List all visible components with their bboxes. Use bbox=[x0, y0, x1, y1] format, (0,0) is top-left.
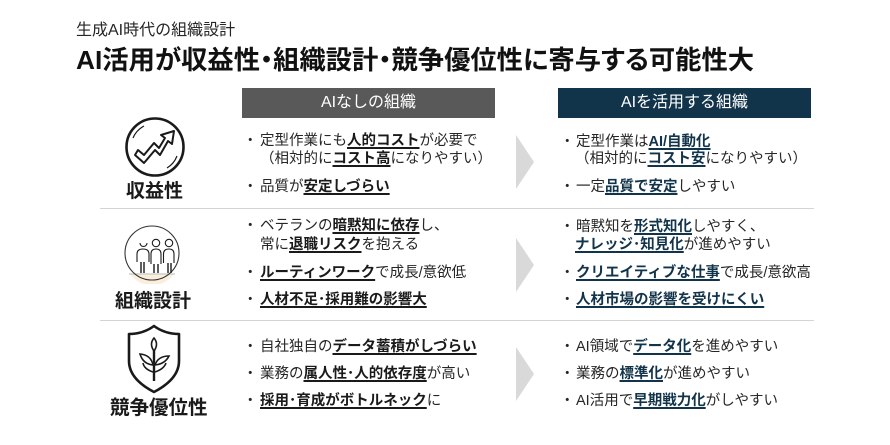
text: competitive with AI bbox=[560, 338, 778, 409]
arrow: organization bbox=[516, 238, 534, 292]
text: ・ bbox=[243, 265, 258, 281]
text: ・ bbox=[560, 393, 574, 409]
text: ・ bbox=[243, 393, 258, 409]
text: 人材不足･採用難の影響大 bbox=[260, 292, 427, 308]
text: ナレッジ･知見化が進めやすい bbox=[575, 237, 771, 253]
text: competitive without AI bbox=[243, 338, 477, 409]
label: profitability: 収益性 bbox=[126, 181, 183, 202]
column header: without AI: AIなしの組織 bbox=[321, 94, 416, 111]
text: 品質が安定しづらい bbox=[260, 179, 390, 195]
icon: shield with plant bbox=[128, 324, 180, 394]
text: profitability without AI bbox=[243, 132, 492, 195]
text: 採用･育成がボトルネックに bbox=[260, 393, 441, 409]
text: ・ bbox=[560, 134, 574, 150]
text: AI活用で早期戦力化がしやすい bbox=[576, 393, 778, 409]
text: ベテランの暗黙知に依存し、 bbox=[260, 218, 448, 234]
text: profitability with AI bbox=[560, 133, 807, 195]
text: 業務の属人性･人的依存度が高い bbox=[260, 366, 470, 382]
text: ・ bbox=[560, 265, 574, 281]
text: 常に退職リスクを抱える bbox=[260, 237, 419, 253]
text: （相対的にコスト高になりやすい） bbox=[260, 151, 492, 167]
text: ・ bbox=[243, 292, 258, 308]
label: competitive advantage: 競争優位性 bbox=[110, 397, 208, 419]
text: （相対的にコスト安になりやすい） bbox=[575, 151, 807, 167]
text: organization without AI bbox=[243, 217, 466, 308]
text: ・ bbox=[560, 219, 574, 235]
arrow: competitive bbox=[516, 347, 534, 401]
text: ・ bbox=[560, 339, 574, 355]
text: ・ bbox=[243, 218, 258, 234]
text: ・ bbox=[243, 339, 258, 355]
text: 業務の標準化が進めやすい bbox=[576, 366, 750, 382]
text: ・ bbox=[243, 133, 258, 149]
icon: profit chart in circle bbox=[125, 117, 185, 177]
text: 定型作業にも人的コストが必要で bbox=[260, 133, 478, 149]
label: organization design: 組織設計 bbox=[115, 291, 191, 312]
icon: people in circle bbox=[124, 226, 180, 284]
text: organization with AI bbox=[560, 218, 811, 308]
text: クリエイティブな仕事で成長/意欲高 bbox=[576, 265, 811, 281]
text: 暗黙知を形式知化しやすく、 bbox=[576, 219, 764, 235]
column header: without AI bbox=[242, 88, 495, 118]
text: 定型作業はAI/自動化 bbox=[576, 134, 711, 150]
text: ・ bbox=[560, 366, 574, 382]
text: ルーティンワークで成長/意欲低 bbox=[260, 265, 466, 281]
text: AI領域でデータ化を進めやすい bbox=[576, 339, 778, 355]
subtitle: 生成AI時代の組織設計 bbox=[76, 22, 235, 39]
text: ・ bbox=[560, 179, 574, 195]
text: ・ bbox=[243, 366, 258, 382]
column header: with AI: AIを活用する組織 bbox=[621, 94, 748, 111]
text: ・ bbox=[560, 292, 574, 308]
title: AI活用が収益性・組織設計・競争優位性に寄与する可能性大 bbox=[76, 45, 754, 75]
column header: with AI bbox=[558, 88, 811, 118]
arrow: profitability bbox=[516, 135, 534, 189]
text: ・ bbox=[243, 179, 258, 195]
text: 人材市場の影響を受けにくい bbox=[576, 292, 764, 308]
text: 自社独自のデータ蓄積がしづらい bbox=[260, 339, 477, 355]
text: 一定品質で安定しやすい bbox=[576, 179, 735, 195]
